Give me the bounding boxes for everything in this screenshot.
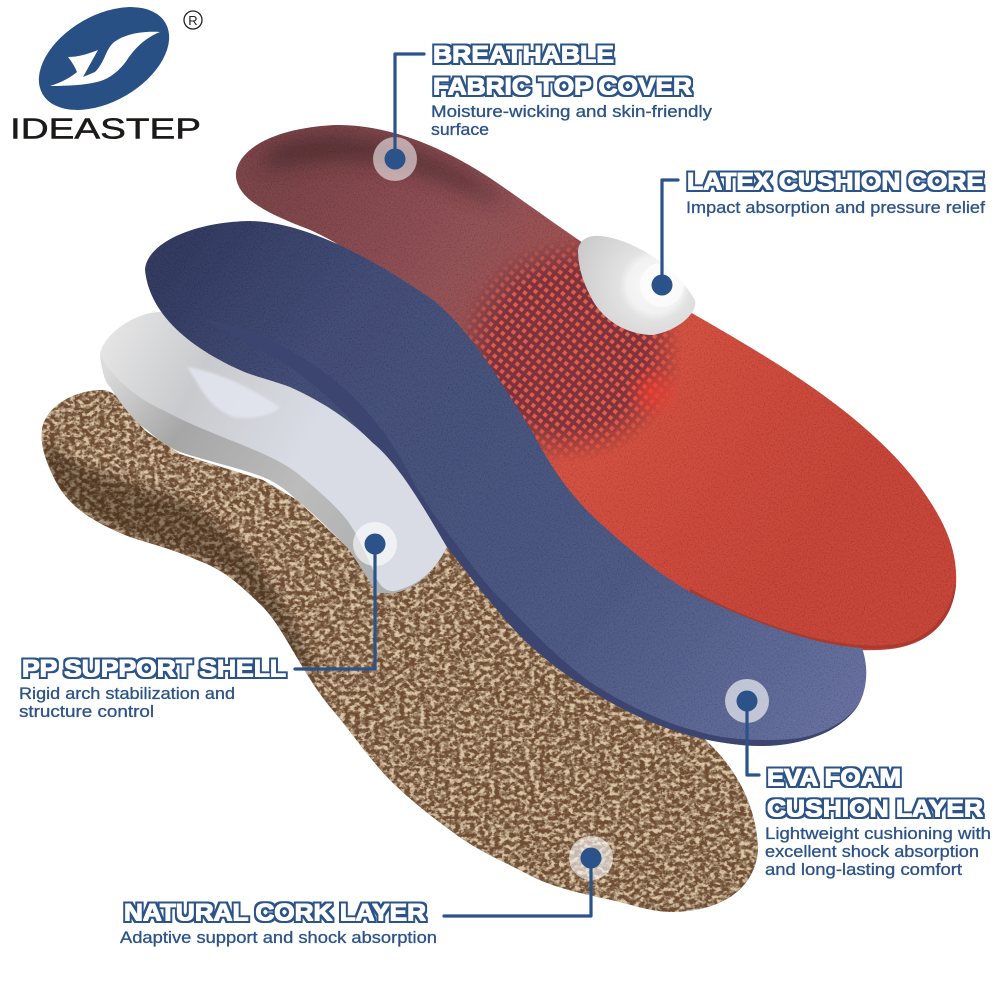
callout: latex cushion core <box>640 168 985 307</box>
description: top cover <box>431 102 713 139</box>
heading: latex cushion core: LATEX CUSHION CORE <box>687 168 984 196</box>
insole layer: fabric top cover <box>236 125 956 650</box>
logo registered mark: R <box>188 13 198 28</box>
callout: natural cork layer <box>120 836 613 947</box>
logo: Ideastep <box>10 0 202 145</box>
description: EVA foam <box>765 824 991 879</box>
heading: EVA foam cushion layer <box>767 764 983 822</box>
marker: EVA foam <box>725 679 769 775</box>
description: PP shell: structure control <box>19 702 154 721</box>
description: EVA foam: and long-lasting comfort <box>765 860 962 879</box>
heading: EVA foam cushion layer: EVA FOAM <box>767 764 901 792</box>
insole layer: PP support shell <box>100 312 447 593</box>
heading: breathable fabric top cover <box>433 42 692 100</box>
callout: EVA foam cushion layer <box>725 679 991 879</box>
insole layer: EVA foam <box>145 221 866 746</box>
logo wordmark: IDEASTEP <box>10 114 201 146</box>
marker: PP shell <box>295 522 397 669</box>
description: latex core: Impact absorption and pressure relief <box>686 198 985 217</box>
description: top cover: Moisture-wicking and skin-friendly <box>431 102 713 121</box>
heading: PP support shell: PP SUPPORT SHELL <box>22 656 286 682</box>
description: cork: Adaptive support and shock absorption <box>120 928 437 947</box>
description: PP shell: Rigid arch stabilization and <box>19 684 235 703</box>
callout: breathable fabric top cover <box>373 42 713 181</box>
logo registered mark <box>184 11 202 29</box>
heading: natural cork layer: NATURAL CORK LAYER <box>124 900 426 926</box>
logo ellipse mark <box>21 0 187 131</box>
insole layer: latex cushion core <box>578 236 695 335</box>
description: PP shell <box>19 684 235 721</box>
callout: PP support shell <box>19 522 397 721</box>
insole layer: natural cork <box>40 390 758 912</box>
heading: breathable fabric top cover: FABRIC TOP COVER <box>433 74 692 100</box>
logo swoosh <box>50 32 160 86</box>
marker: cork <box>444 836 613 916</box>
description: EVA foam: excellent shock absorption <box>765 842 979 861</box>
marker: latex core <box>640 180 684 307</box>
heading: breathable fabric top cover: BREATHABLE <box>433 42 614 68</box>
heading: EVA foam cushion layer: CUSHION LAYER <box>767 796 983 822</box>
description: EVA foam: Lightweight cushioning with <box>765 824 991 843</box>
marker: top cover <box>373 54 424 181</box>
description: top cover: surface <box>431 120 489 139</box>
